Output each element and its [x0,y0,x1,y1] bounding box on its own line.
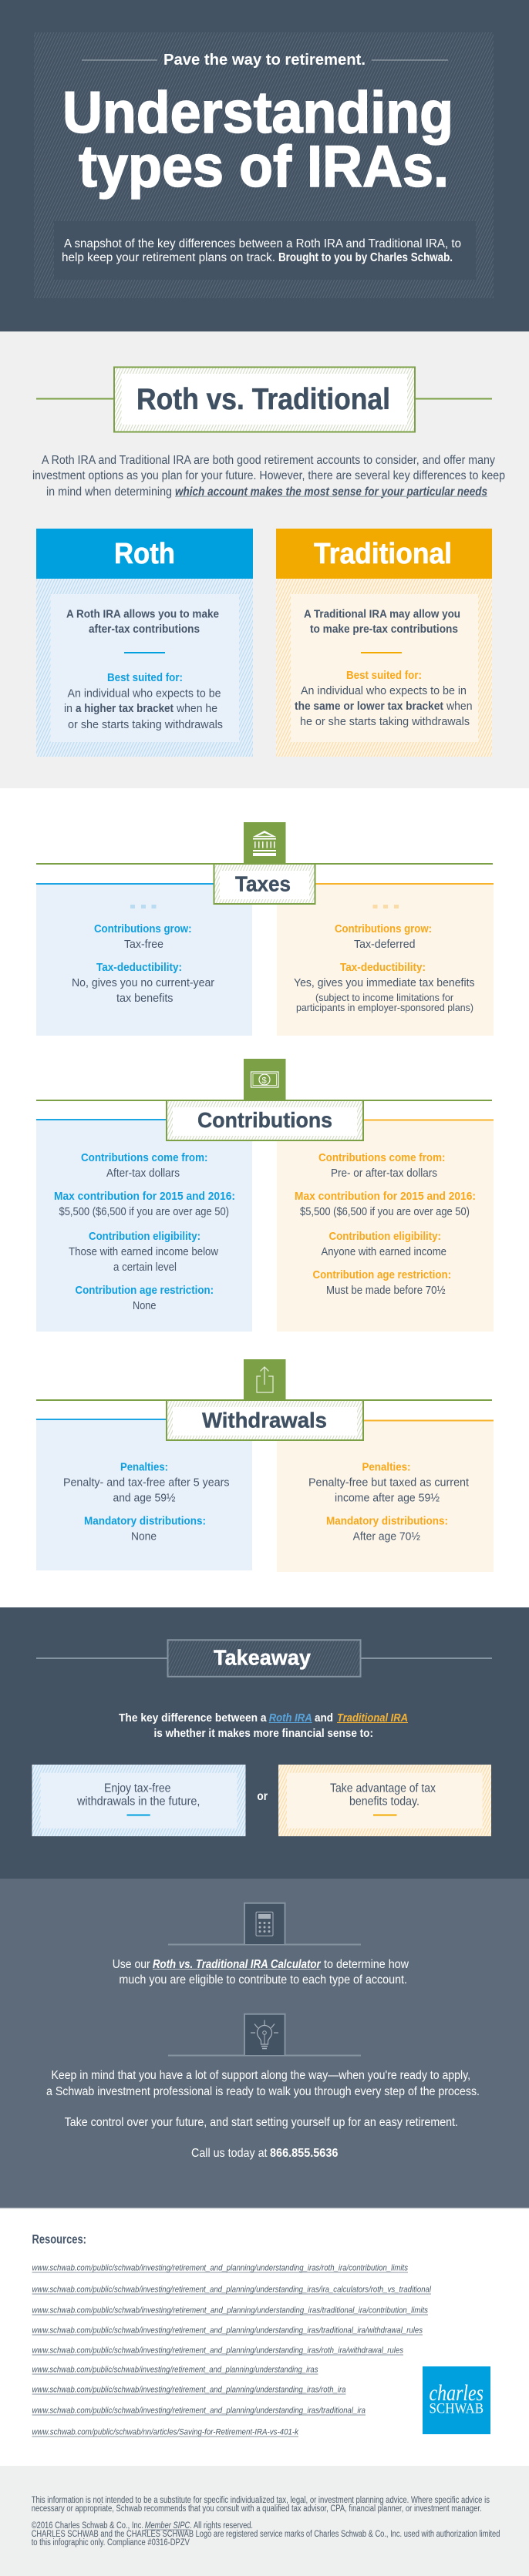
closing message text: Keep in mind that you have a lot of support along the way—when you're ready to apply, [51,2069,470,2082]
Withdrawals right column: Mandatory distributions: [326,1515,448,1528]
Taxes left column [36,883,252,1036]
resource links: www.schwab.com/public/schwab/investing/retirement_and_planning/understanding_iras/traditional_ira/contribution_limits [32,2306,428,2316]
heading: Takeaway [36,1640,492,1677]
resource links [32,2264,431,2437]
intro paragraph [32,454,505,499]
Taxes right column: Yes, gives you immediate tax benefits [294,976,475,989]
Taxes right column: Tax-deductibility: [340,961,426,974]
Withdrawals right column: After age 70½ [353,1530,420,1543]
header intro text: A snapshot of the key differences between a Roth IRA and Traditional IRA, to [64,237,461,250]
resource links: www.schwab.com/public/schwab/investing/retirement_and_planning/understanding_iras/roth_ira/contribution_limits [32,2264,408,2273]
calculator text: to determine how [324,1958,409,1971]
panel: Roth card: after-tax contributions [89,623,200,636]
panel: Roth card: when he [176,702,217,715]
connector word: or: or [257,1790,268,1803]
heading: Roth vs. Traditional [36,367,492,432]
heading: Contributions: Contributions [197,1108,332,1132]
Contributions right column: Anyone with earned income [321,1245,446,1258]
resource links: www.schwab.com/public/schwab/investing/retirement_and_planning/understanding_iras/ira_calculators/roth_vs_traditional [32,2285,431,2295]
disclaimer text [32,2496,500,2547]
icon: light bulb [168,2014,361,2056]
panel: Roth card: Roth [114,538,175,570]
Contributions right column: Contributions come from: [318,1151,446,1164]
resource links: www.schwab.com/public/schwab/investing/retirement_and_planning/understanding_iras/traditional_ira/withdrawal_rules [32,2326,423,2336]
Taxes left column: Contributions grow: [94,922,191,935]
Contributions left column: None [133,1299,156,1312]
title: types of IRAs. [79,134,449,200]
heading: Taxes [214,864,315,904]
Contributions left column [36,1119,252,1332]
key difference text: Traditional IRA [337,1711,408,1725]
disclaimer text: . All rights reserved. [190,2521,253,2531]
Contributions right column [277,1119,494,1332]
panel: page header [0,0,529,332]
panel: Withdrawals [36,1359,494,1572]
Taxes left column: Tax-free [124,938,163,951]
key difference text: is whether it makes more financial sense to: [154,1727,373,1740]
callout: take advantage of tax benefits: benefits today. [349,1795,419,1809]
Taxes right column: (subject to income limitations for [315,992,454,1003]
Contributions left column: Contribution age restriction: [76,1284,214,1297]
panel: Traditional card: Traditional [314,538,452,570]
Taxes left column: No, gives you no current-year [72,976,214,989]
Contributions left column: Those with earned income below [69,1245,218,1258]
Withdrawals left column: Penalty- and tax-free after 5 years [63,1476,230,1490]
logo: Charles Schwab [423,2366,490,2434]
Withdrawals left column: None [131,1530,157,1543]
panel: roth vs traditional intro [0,332,529,788]
heading: Withdrawals [167,1400,363,1440]
panel: Traditional card [276,529,492,757]
header intro text: Brought to you by Charles Schwab. [278,251,453,264]
panel: Traditional card: he or she starts taking withdrawals [300,715,470,728]
callout: enjoy tax-free withdrawals: Enjoy tax-free [104,1782,170,1795]
icon: dollar bill: $ [262,1076,267,1085]
Withdrawals right column: income after age 59½ [335,1492,440,1505]
icon: bank building [244,822,285,864]
key difference text: The key difference between a [119,1711,267,1725]
closing message text: Take control over your future, and start setting yourself up for an easy retirement. [65,2116,458,2129]
closing message text [46,2069,480,2160]
resource links: www.schwab.com/public/schwab/nn/articles/Saving-for-Retirement-IRA-vs-401-k [32,2428,298,2437]
Taxes right column: participants in employer-sponsored plans) [296,1002,473,1013]
Contributions left column: $5,500 ($6,500 if you are over age 50) [59,1205,229,1218]
panel: next steps [0,1879,529,2208]
Taxes right column: Contributions grow: [335,922,432,935]
key difference text: and [315,1711,333,1725]
intro paragraph: which account makes the most sense for your particular needs [175,485,487,499]
panel: Roth card: Best suited for: [107,671,183,684]
calculator text: Roth vs. Traditional IRA Calculator [153,1958,321,1971]
panel: Roth card: or she starts taking withdrawals [68,718,223,731]
Withdrawals left column: Penalties: [120,1461,168,1474]
Withdrawals right column: Penalty-free but taxed as current [308,1476,470,1490]
closing message text: 866.855.5636 [270,2147,339,2160]
header kicker: Pave the way to retirement. [163,52,366,69]
Taxes left column: tax benefits [116,992,173,1005]
panel: Traditional card: A Traditional IRA may allow you [304,607,460,621]
Taxes right column: Tax-deferred [354,938,415,951]
Contributions left column: Max contribution for 2015 and 2016: [54,1190,235,1203]
calculator text: Use our [113,1958,150,1971]
Taxes left column: Tax-deductibility: [96,961,182,974]
logo: Charles Schwab: charles [429,2380,484,2406]
header intro text [54,221,476,280]
panel: resources [32,2232,490,2437]
panel: Traditional card: the same or lower tax bracket [295,700,443,713]
panel: Roth card: in [64,702,72,715]
heading: Takeaway: Takeaway [214,1646,311,1670]
disclaimer text: ©2016 Charles Schwab & Co., Inc. [32,2521,143,2531]
icon: dollar bill [244,1059,285,1100]
key difference text: Roth IRA [269,1711,312,1725]
title: Understanding [62,80,453,146]
icon: calculator [168,1903,361,1945]
key difference text [119,1711,408,1740]
panel: Roth card: An individual who expects to be [68,687,221,700]
header intro text: help keep your retirement plans on track. [62,251,275,264]
heading: Roth vs. Traditional: Roth vs. Traditional [136,383,390,416]
resource links: www.schwab.com/public/schwab/investing/retirement_and_planning/understanding_iras/traditional_ira [32,2406,366,2416]
logo: Charles Schwab: SCHWAB [429,2401,484,2417]
Contributions left column: Contributions come from: [81,1151,208,1164]
panel: Roth card: A Roth IRA allows you to make [66,607,219,621]
panel: Traditional card: Best suited for: [346,669,422,682]
panel: Taxes [36,822,494,1036]
Taxes right column [277,883,494,1036]
disclaimer text: to this infographic only. Compliance #0316-DPZV [32,2538,190,2547]
heading: Taxes: Taxes [235,872,291,896]
panel: Traditional card: when [446,700,472,713]
Contributions right column: Contribution age restriction: [313,1268,451,1281]
Contributions left column: After-tax dollars [106,1167,180,1180]
disclaimer text: Member SIPC [145,2521,190,2531]
Withdrawals left column: Mandatory distributions: [84,1515,206,1528]
closing message text: Call us today at [191,2147,268,2160]
heading: Resources: Resources: [32,2232,86,2246]
panel: legal footer [0,2466,529,2576]
Withdrawals left column: and age 59½ [113,1492,176,1505]
Withdrawals left column [36,1419,252,1570]
callout: enjoy tax-free withdrawals: withdrawals in the future, [76,1795,200,1809]
title [62,80,453,200]
intro paragraph: A Roth IRA and Traditional IRA are both good retirement accounts to consider, and offer many [42,454,495,467]
calculator text [113,1958,409,1987]
resource links: www.schwab.com/public/schwab/investing/retirement_and_planning/understanding_iras/roth_ira [32,2386,345,2395]
panel: Traditional card: An individual who expects to be in [301,684,467,697]
callout: take advantage of tax benefits: Take advantage of tax [330,1782,436,1795]
Withdrawals right column: Penalties: [362,1461,410,1474]
callout: enjoy tax-free withdrawals [32,1765,245,1836]
Contributions left column: a certain level [113,1261,177,1274]
calculator text: much you are eligible to contribute to each type of account. [119,1973,407,1987]
resource links: www.schwab.com/public/schwab/investing/retirement_and_planning/understanding_iras [32,2366,318,2375]
Contributions left column: Contribution eligibility: [89,1230,200,1243]
closing message text: a Schwab investment professional is ready to walk you through every step of the process. [46,2085,480,2098]
Contributions right column: Must be made before 70½ [326,1284,446,1297]
heading: Contributions [167,1100,363,1140]
Contributions right column: $5,500 ($6,500 if you are over age 50) [300,1205,470,1218]
intro paragraph: in mind when determining [46,485,172,499]
Contributions right column: Contribution eligibility: [329,1230,441,1243]
Contributions right column: Pre- or after-tax dollars [331,1167,437,1180]
panel: Contributions [36,1059,494,1332]
panel: Roth card [36,529,253,757]
hatched header panel [34,32,494,298]
panel: Traditional card: to make pre-tax contributions [310,623,458,636]
Contributions right column: Max contribution for 2015 and 2016: [295,1190,476,1203]
Withdrawals right column [277,1419,494,1572]
heading: Withdrawals: Withdrawals [202,1409,327,1432]
callout: take advantage of tax benefits [278,1765,491,1836]
panel: Takeaway [0,1607,529,1879]
icon: share arrow [244,1359,285,1400]
panel: Roth card: a higher tax bracket [76,702,174,715]
resource links: www.schwab.com/public/schwab/investing/retirement_and_planning/understanding_iras/roth_ira/withdrawal_rules [32,2346,403,2356]
